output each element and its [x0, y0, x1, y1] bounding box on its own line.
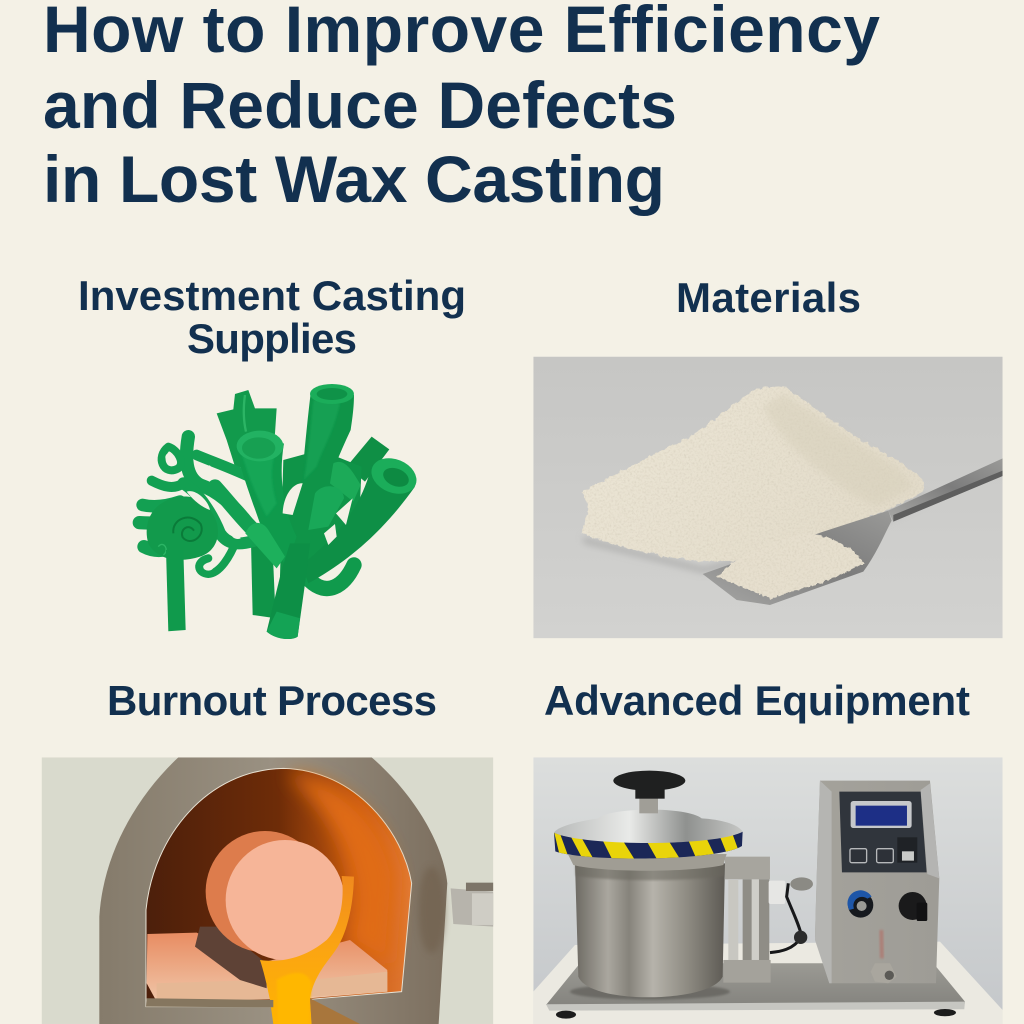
hollow cutouts	[165, 453, 353, 571]
panel: materials	[533, 274, 1003, 638]
title: and Reduce Defects	[43, 68, 677, 142]
dark wedge under cylinder	[195, 927, 267, 988]
base plate	[546, 963, 965, 1011]
right tube	[302, 465, 415, 583]
black switch	[899, 892, 927, 920]
upper tube	[287, 393, 354, 560]
studio background	[533, 757, 1003, 1024]
title: in Lost Wax Casting	[43, 142, 665, 216]
illustration: green wax tree pattern	[139, 384, 422, 639]
central mass	[280, 450, 362, 577]
spoon	[703, 458, 1003, 605]
pot collar	[568, 854, 727, 871]
furnace arch frame	[99, 757, 447, 1024]
rear right tube	[347, 437, 389, 482]
rose filigree	[147, 496, 218, 560]
lid knob	[613, 771, 685, 799]
plate shadow of pot	[570, 984, 730, 1000]
stripe lid rim	[554, 832, 743, 862]
control panel face	[839, 792, 927, 872]
lid top	[554, 810, 743, 843]
heading: burnout process: Burnout Process	[107, 677, 437, 724]
right lower hook	[310, 565, 354, 589]
panel: advanced equipment	[533, 677, 1003, 1024]
hose and valve	[769, 877, 813, 953]
photo: refractory powder with metal spoon	[533, 357, 1003, 638]
control cabinet	[815, 781, 939, 983]
central bud	[308, 486, 344, 530]
left filigree branches	[139, 437, 263, 574]
clamp bracket	[723, 857, 771, 983]
photo background	[533, 357, 1003, 638]
photo: burnout furnace pouring molten metal	[42, 757, 493, 1024]
lower lip of frame	[146, 998, 273, 1007]
furnace cavity	[146, 768, 412, 1007]
title	[43, 0, 880, 216]
middle tube	[237, 443, 297, 567]
blue knob	[848, 896, 874, 918]
powder pile	[582, 387, 924, 562]
heading: materials: Materials	[676, 274, 861, 321]
rear trunk	[251, 527, 276, 618]
rear wax cluster	[217, 390, 277, 470]
table surface	[533, 942, 1003, 1024]
molten stream	[260, 876, 354, 1024]
pot body	[575, 863, 725, 997]
lid stem	[639, 798, 658, 813]
cylinder face	[226, 840, 344, 960]
heading: advanced equipment: Advanced Equipment	[544, 677, 970, 724]
pot shadow band	[575, 865, 725, 880]
drain fitting	[871, 963, 897, 983]
pile shadow	[583, 493, 930, 573]
buttons	[850, 849, 867, 863]
display	[851, 801, 912, 828]
main trunk	[267, 543, 310, 639]
heading: investment casting supplies: Supplies	[187, 315, 357, 362]
powder on spoon	[717, 533, 863, 598]
furnace floor	[147, 933, 387, 1002]
hot upper glow	[287, 773, 397, 967]
pile shading	[768, 398, 901, 500]
heading: investment casting supplies	[78, 272, 466, 362]
lower bud	[245, 523, 285, 568]
rubber feet	[556, 1009, 956, 1019]
stain on frame	[418, 867, 445, 953]
side bulb	[330, 462, 361, 502]
cylinder side	[206, 831, 299, 952]
door hinge	[451, 883, 493, 927]
photo: vacuum casting machine	[533, 757, 1003, 1024]
panel: investment casting supplies	[78, 272, 466, 639]
panel: burnout process	[42, 677, 493, 1024]
heading: investment casting supplies: Investment Casting	[78, 272, 466, 319]
furnace wall	[42, 757, 493, 1024]
left stem	[166, 550, 186, 631]
